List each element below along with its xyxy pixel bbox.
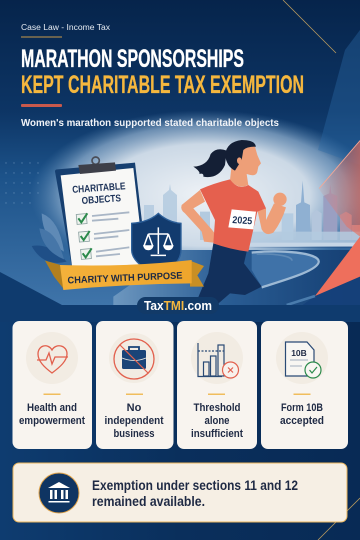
right scene [113,140,360,317]
callout: exemption conclusion: Exemption under sections 11 and 12 [92,477,298,493]
subtitle: Women's marathon supported stated charitable objects [21,117,279,129]
card: form 10B accepted: accepted [280,415,324,427]
runner legs [195,243,262,305]
card: threshold alone insufficient [177,321,257,449]
card: health and empowerment [12,321,92,449]
card: no independent business: No [127,402,142,414]
runner back arm [181,190,216,243]
card: health and empowerment: Health and [27,402,77,414]
title [21,45,304,99]
coral triangle [315,237,360,296]
icon: bar chart with cross [198,343,238,378]
left skyline [144,184,177,240]
brand pill: TaxTMI.com [144,299,212,313]
dot pattern [5,162,39,204]
shield with scales [132,213,181,277]
hero illustration [0,140,360,322]
city skyline [200,181,360,247]
clipboard: CHARITABLE [72,181,126,196]
icon: form with check: 10B [291,348,307,358]
callout: exemption conclusion: remained available. [92,493,205,509]
icon: crossed briefcase [114,339,154,379]
runner bib [228,209,256,229]
card: no independent business: business [114,428,154,440]
ribbon banner [45,260,204,290]
lower dark polygon [0,272,360,322]
runner [181,140,287,305]
icon: institution [39,473,79,513]
clipboard [55,157,147,272]
card: no independent business [96,321,174,449]
brand pill [137,297,219,314]
coral translucent shape [318,140,360,237]
card: threshold alone insufficient: alone [204,415,230,427]
runner front arm [257,203,286,234]
runner neck and face [230,146,261,187]
eyebrow label: Case Law - Income Tax [21,23,110,32]
clipboard: OBJECTS [81,193,122,207]
card: form 10B accepted: Form 10B [281,402,323,414]
card: form 10B accepted [261,321,348,449]
card: no independent business: independent [104,415,164,427]
leaves [32,246,67,263]
icon: heart with pulse [37,346,68,373]
callout: exemption conclusion [13,463,347,522]
ribbon banner: CHARITY WITH PURPOSE [67,270,183,287]
card: threshold alone insufficient: insufficient [191,428,243,440]
runner: 2025 [232,215,253,227]
left scene [32,157,181,277]
road [113,250,360,317]
card: threshold alone insufficient: Threshold [194,402,240,414]
runner shirt [200,179,266,252]
runner hair [225,140,256,171]
card: health and empowerment: empowerment [19,415,85,427]
